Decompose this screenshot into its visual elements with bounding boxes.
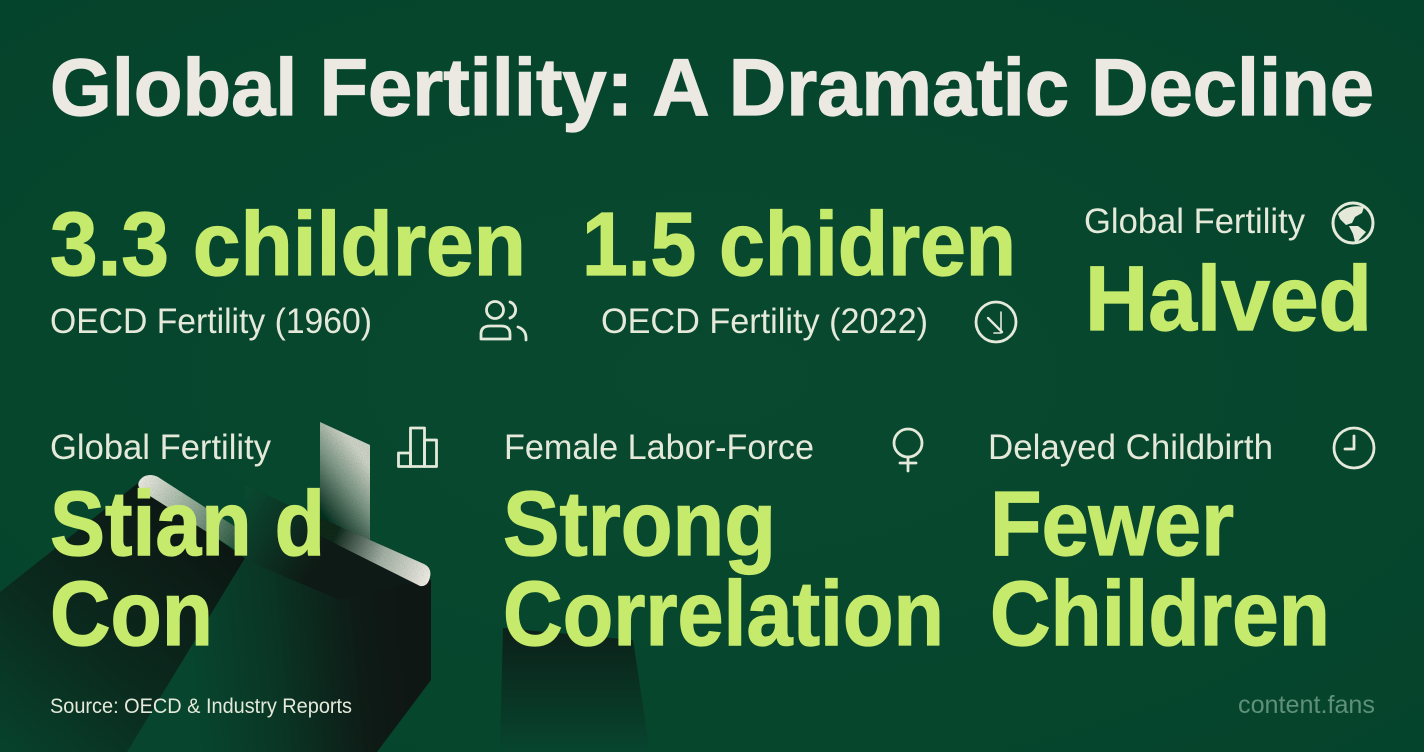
icon: female symbol bbox=[894, 429, 922, 471]
source note: Source: OECD & Industry Reports bbox=[50, 695, 352, 718]
stat: OECD fertility 2022: OECD Fertility (2022) bbox=[601, 302, 928, 341]
icon: clock bbox=[1334, 428, 1374, 468]
card: global fertility stand con: Global Fertility bbox=[50, 428, 271, 467]
card: female labor-force strong correlation: Correlation bbox=[503, 563, 944, 665]
stat: OECD fertility 1960: 3.3 children bbox=[50, 195, 526, 295]
stat: OECD fertility 1960 bbox=[50, 195, 526, 341]
decorative cast shadows and pale shapes bbox=[0, 422, 650, 752]
icon: globe bbox=[1333, 203, 1373, 243]
card: delayed childbirth fewer children bbox=[988, 428, 1374, 665]
card: female labor-force strong correlation: Strong bbox=[503, 473, 776, 575]
icon: bar chart bbox=[398, 428, 436, 466]
stat: global fertility halved bbox=[1084, 202, 1373, 350]
stat: OECD fertility 2022: 1.5 chidren bbox=[582, 195, 1016, 295]
title: Global Fertility: A Dramatic Decline bbox=[50, 43, 1374, 133]
card: female labor-force strong correlation: Female Labor-Force bbox=[504, 428, 814, 467]
card: global fertility stand con: Con bbox=[50, 563, 213, 665]
stat: OECD fertility 1960: OECD Fertility (1960) bbox=[50, 302, 372, 341]
icon: downward trend circle bbox=[976, 302, 1016, 342]
brand credit: content.fans bbox=[1238, 691, 1375, 719]
card: global fertility stand con: Stian d bbox=[50, 473, 325, 575]
stat: global fertility halved: Global Fertility bbox=[1084, 202, 1305, 241]
icon: people bbox=[481, 302, 526, 340]
card: female labor-force strong correlation bbox=[503, 428, 944, 665]
card: global fertility stand con bbox=[50, 428, 436, 665]
card: delayed childbirth fewer children: Fewer bbox=[990, 473, 1234, 575]
card: delayed childbirth fewer children: Delayed Childbirth bbox=[988, 428, 1273, 467]
stat: OECD fertility 2022 bbox=[582, 195, 1016, 342]
stat: global fertility halved: Halved bbox=[1085, 248, 1372, 350]
card: delayed childbirth fewer children: Children bbox=[990, 563, 1330, 665]
